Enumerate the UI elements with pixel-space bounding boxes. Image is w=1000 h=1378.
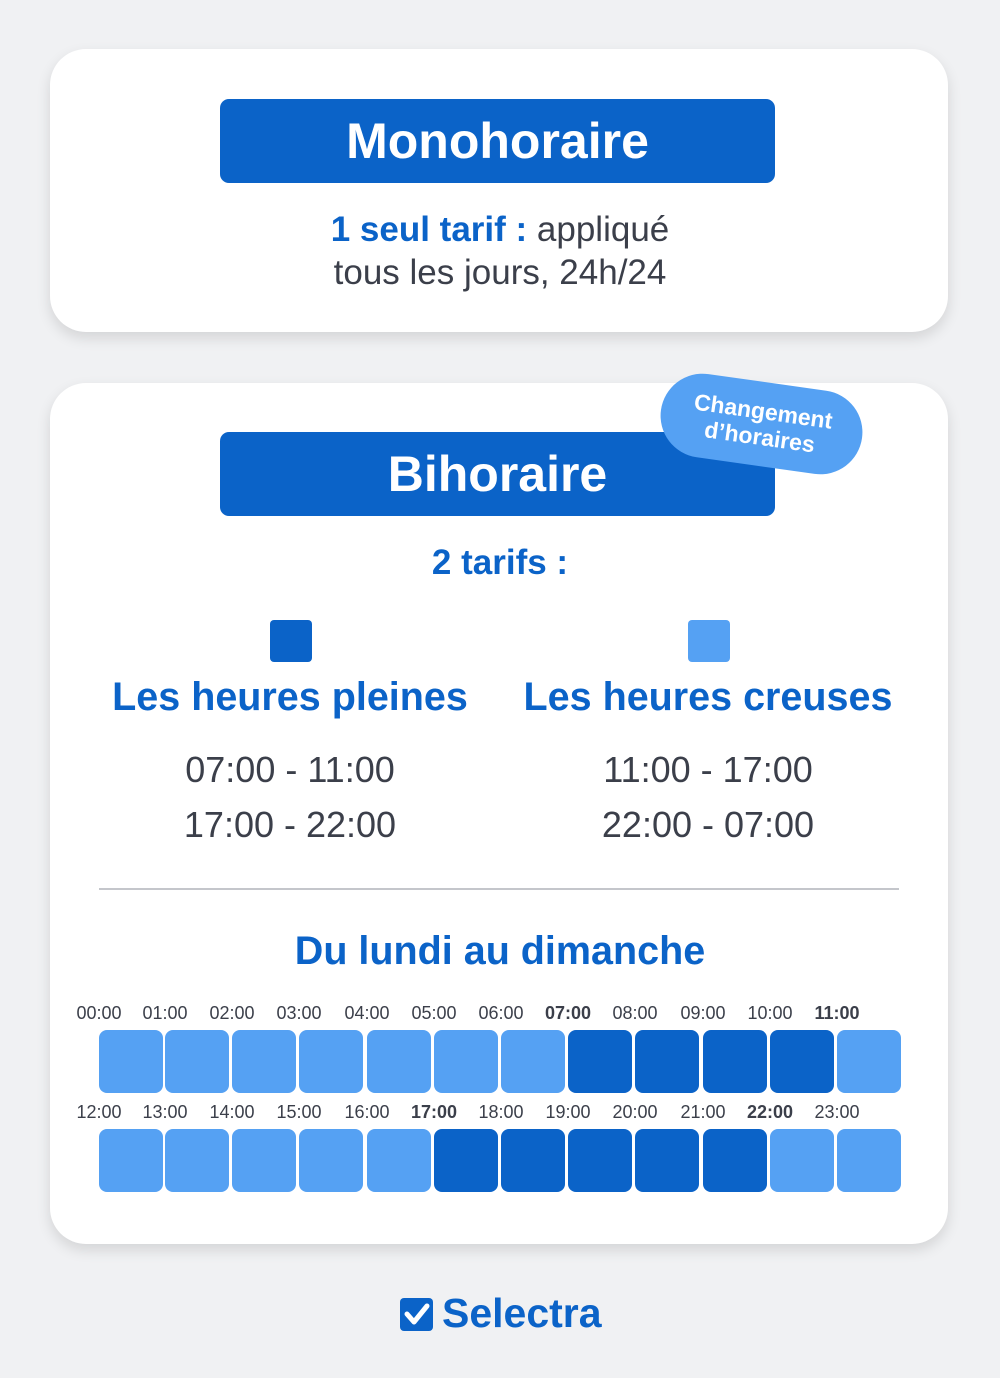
heading: Monohoraire	[220, 99, 775, 183]
text: monohoraire description	[331, 210, 669, 292]
logo: Selectra: Selectra	[442, 1290, 602, 1336]
column: heures creuses: 22:00 - 07:00	[602, 804, 814, 845]
column: heures pleines: 07:00 - 11:00	[185, 749, 395, 790]
chart: hourly timeline: 04:00	[344, 1003, 390, 1023]
panel: bihoraire	[50, 383, 948, 1244]
column: heures creuses	[524, 675, 892, 845]
column: heures creuses: Les heures creuses	[524, 675, 892, 719]
chart: hourly timeline: 05:00	[411, 1003, 457, 1023]
badge: changement d'horaires	[655, 368, 868, 480]
chart: hourly timeline: 18:00	[478, 1102, 524, 1122]
chart: hourly timeline: 23:00	[814, 1102, 860, 1122]
icon: checkbox	[400, 1298, 433, 1331]
chart: hourly timeline: 09:00	[680, 1003, 726, 1023]
chart: hourly timeline: 16:00	[344, 1102, 390, 1122]
chart: hourly timeline: 11:00	[814, 1003, 860, 1023]
column: heures pleines: 17:00 - 22:00	[184, 804, 396, 845]
chart: hourly timeline: 13:00	[142, 1102, 188, 1122]
chart: hourly timeline: 15:00	[276, 1102, 322, 1122]
chart: hourly timeline	[76, 1003, 901, 1192]
chart: hourly timeline: 01:00	[142, 1003, 188, 1023]
badge: changement d'horaires: Changement	[693, 389, 834, 434]
chart: hourly timeline: 07:00	[545, 1003, 591, 1023]
icon: light square	[688, 620, 730, 662]
chart: hourly timeline: 21:00	[680, 1102, 726, 1122]
heading: Bihoraire	[220, 432, 775, 516]
chart: hourly timeline: 10:00	[747, 1003, 793, 1023]
chart: hourly timeline: 20:00	[612, 1102, 658, 1122]
badge: changement d'horaires: d’horaires	[703, 416, 817, 457]
chart: hourly timeline: 17:00	[411, 1102, 457, 1122]
text: 2 tarifs: 2 tarifs :	[432, 543, 568, 582]
chart: hourly timeline: 19:00	[545, 1102, 591, 1122]
text: monohoraire description: tous les jours, 24h/24	[334, 253, 666, 292]
chart: hourly timeline: 06:00	[478, 1003, 524, 1023]
column: heures pleines	[112, 675, 468, 845]
chart: hourly timeline: 03:00	[276, 1003, 322, 1023]
chart: hourly timeline: 14:00	[209, 1102, 255, 1122]
chart: hourly timeline: 00:00	[76, 1003, 122, 1023]
heading: Monohoraire: Monohoraire	[346, 113, 649, 169]
heading: du lundi au dimanche: Du lundi au dimanche	[295, 929, 705, 973]
chart: hourly timeline: 22:00	[747, 1102, 793, 1122]
icon: dark square	[270, 620, 312, 662]
column: heures pleines: Les heures pleines	[112, 675, 468, 719]
text: monohoraire description: 1 seul tarif : appliqué	[331, 210, 669, 249]
chart: hourly timeline: 02:00	[209, 1003, 255, 1023]
column: heures creuses: 11:00 - 17:00	[603, 749, 813, 790]
chart: hourly timeline: 12:00	[76, 1102, 122, 1122]
chart: hourly timeline: 08:00	[612, 1003, 658, 1023]
heading: Bihoraire: Bihoraire	[388, 446, 607, 502]
panel: monohoraire	[50, 49, 948, 332]
